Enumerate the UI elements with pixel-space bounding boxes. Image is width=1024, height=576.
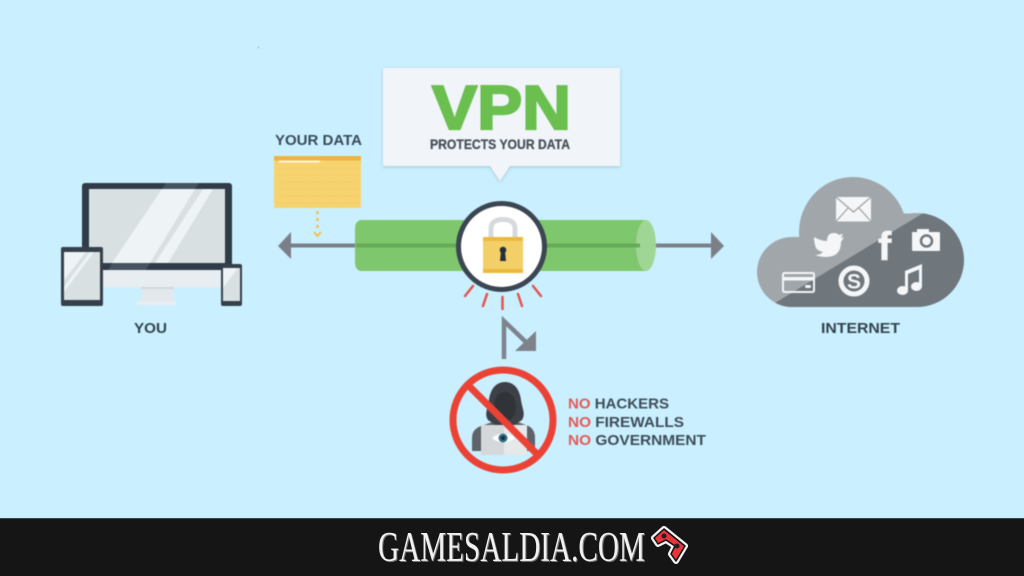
- phone: [221, 264, 242, 306]
- label: internet: INTERNET: [821, 321, 900, 337]
- shackle: [491, 220, 515, 238]
- camera: [912, 229, 940, 251]
- laptop: [481, 425, 527, 455]
- line: no firewalls: NO FIREWALLS: [568, 414, 684, 431]
- tablet: [61, 247, 103, 306]
- arrow: left: [278, 232, 358, 259]
- monitor stand: [103, 270, 222, 305]
- skype: S: [847, 270, 861, 294]
- text: no list: [568, 396, 706, 449]
- icon: devices: [61, 183, 242, 306]
- label: you: YOU: [134, 321, 167, 337]
- twitter: [814, 233, 844, 257]
- icon: data folder: [274, 156, 361, 208]
- lock body: [483, 237, 523, 273]
- skype: [841, 268, 867, 294]
- prohibition sign: [453, 370, 553, 470]
- facebook: f: [878, 225, 892, 269]
- vpn subheading: PROTECTS YOUR DATA: [430, 137, 570, 152]
- line: no government: NO GOVERNMENT: [568, 432, 706, 449]
- eye: [492, 434, 515, 442]
- line: no hackers: NO HACKERS: [568, 396, 669, 412]
- speck: [258, 47, 259, 48]
- arrow: blocked path: [504, 321, 536, 359]
- icon: padlock: [458, 204, 544, 290]
- credit card: [783, 273, 814, 292]
- icon: gamepad: [654, 529, 685, 561]
- footer bar: [0, 518, 1024, 576]
- icon: internet cloud: [756, 176, 965, 308]
- tunnel: [355, 220, 656, 271]
- hood: [486, 382, 524, 426]
- shoulders: [472, 421, 535, 451]
- arrow: right: [650, 232, 724, 259]
- callout: vpn: [383, 68, 620, 181]
- envelope: [836, 197, 871, 222]
- face: [494, 392, 516, 421]
- footer brand: GAMESALDIA.COM: [378, 525, 645, 571]
- arrow: data drop: [314, 211, 321, 236]
- alert rays: [465, 286, 541, 309]
- label: your data: YOUR DATA: [275, 133, 363, 149]
- vpn heading: VPN: [432, 74, 571, 143]
- icon: no hackers: [453, 370, 553, 470]
- music note: [897, 264, 922, 295]
- monitor: [82, 183, 232, 270]
